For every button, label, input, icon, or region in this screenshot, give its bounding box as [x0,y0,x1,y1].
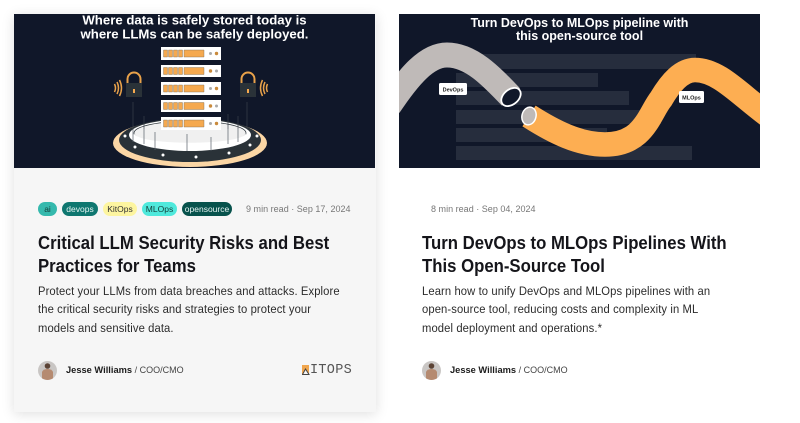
illustration: LLM secure deployment [14,14,375,168]
right description: open-source tool, reducing costs and complexity in ML [422,302,698,316]
tag: devops [62,202,98,216]
left description: the critical security risks and strategies to protect your [38,302,311,316]
tag: ai [38,202,57,216]
left meta: 9 min read · Sep 17, 2024 [246,204,351,214]
left heading: Critical LLM Security Risks and Best [38,232,329,253]
illustration: DevOps to MLOps pipeline [399,14,760,168]
panel: left article card [14,14,376,412]
illustration: DevOps to MLOps pipeline: Turn DevOps to MLOps pipeline with [471,16,688,30]
tag: KitOps: KitOps [107,204,133,214]
tag: KitOps [103,202,137,216]
tag: MLOps [142,202,177,216]
left description [38,284,340,335]
left description: Protect your LLMs from data breaches and attacks. Explore [38,284,340,298]
right author: Jesse Williams / COO/CMO [450,365,568,375]
right description [422,284,710,335]
tag: MLOps: MLOps [146,204,173,214]
right heading: This Open-Source Tool [422,255,605,276]
illustration: DevOps to MLOps pipeline: this open-source tool [516,29,643,43]
right heading: Turn DevOps to MLOps Pipelines With [422,232,727,253]
illustration: LLM secure deployment: where LLMs can be safely deployed. [80,26,308,42]
tag: opensource [182,202,232,216]
left heading [38,232,329,276]
right description: model deployment and operations.* [422,321,602,335]
left description: models and sensitive data. [38,321,174,335]
tag: ai: ai [44,204,51,214]
logo: KitOps: ITOPS [310,363,352,378]
right avatar [422,361,441,380]
tag: opensource: opensource [185,204,229,214]
right description: Learn how to unify DevOps and MLOps pipelines with an [422,284,710,298]
illustration: DevOps to MLOps pipeline: DevOps [443,88,463,94]
left avatar [38,361,57,380]
left heading: Practices for Teams [38,255,196,276]
right heading [422,232,727,276]
tag: devops: devops [66,204,94,214]
illustration: DevOps to MLOps pipeline: MLOps [682,96,701,102]
tags row [38,202,232,216]
left author: Jesse Williams / COO/CMO [66,365,184,375]
right meta: 8 min read · Sep 04, 2024 [431,204,536,214]
